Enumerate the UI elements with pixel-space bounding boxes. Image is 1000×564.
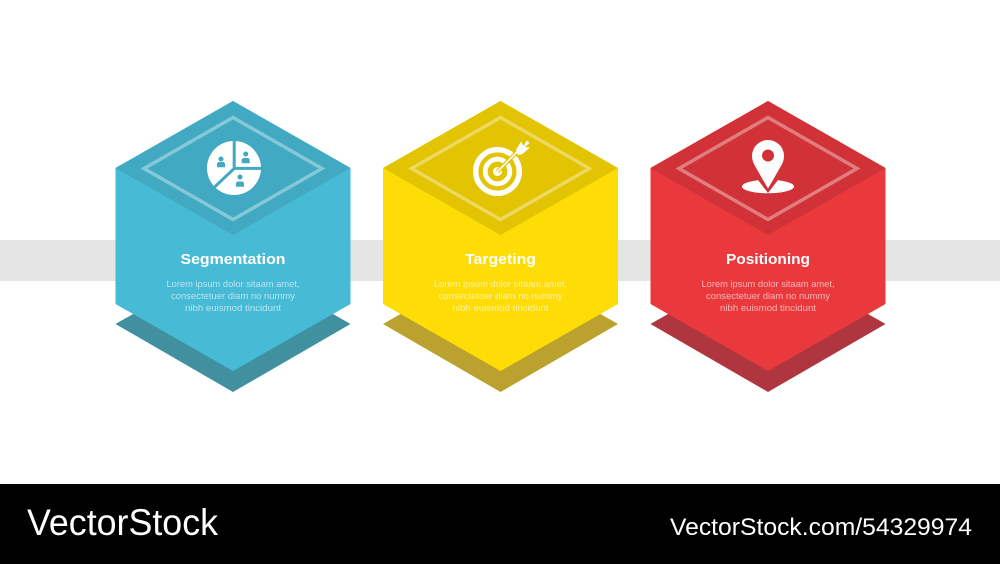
text block: positioning: Lorem ipsum dolor sitaam amet, xyxy=(702,278,834,289)
icon: target with arrow xyxy=(476,140,530,193)
top diamond: positioning xyxy=(650,101,886,235)
shadow: targeting xyxy=(383,257,618,392)
text block: positioning: nibh euismod tincidunt xyxy=(720,302,816,313)
heading: targeting: Targeting xyxy=(465,251,536,268)
text block: segmentation: Lorem ipsum dolor sitaam amet, xyxy=(166,278,300,289)
panel: segmentation xyxy=(116,101,350,392)
text block: targeting: Lorem ipsum dolor sitaam amet, xyxy=(434,278,567,289)
inner diamond outline: targeting xyxy=(412,118,590,220)
text block: positioning: consectetuer diam no nummy xyxy=(706,290,830,301)
text block: targeting xyxy=(434,278,567,313)
text block: segmentation: nibh euismod tincidunt xyxy=(185,302,281,313)
top diamond: segmentation xyxy=(116,101,350,235)
text block: targeting: nibh euismod tincidunt xyxy=(452,302,549,313)
text block: targeting: consectetuer diam no nummy xyxy=(438,290,563,301)
hexagon body: positioning xyxy=(650,101,886,371)
panel: targeting xyxy=(383,101,618,392)
text block: segmentation xyxy=(166,278,300,313)
background band xyxy=(0,240,1000,281)
icon: map pin xyxy=(742,140,794,193)
heading: positioning: Positioning xyxy=(726,251,810,268)
panel: positioning xyxy=(650,101,886,392)
footer logo text: VectorStock xyxy=(27,502,218,543)
footer url: VectorStock.com/54329974 xyxy=(670,514,972,541)
icon: pie chart with people xyxy=(207,139,263,195)
text block: segmentation: consectetuer diam no nummy xyxy=(171,290,295,301)
text block: positioning xyxy=(702,278,834,313)
inner diamond outline: segmentation xyxy=(144,118,322,220)
heading: segmentation: Segmentation xyxy=(180,251,286,268)
shadow: segmentation xyxy=(116,257,350,392)
hexagon body: segmentation xyxy=(116,101,350,371)
footer bar xyxy=(0,484,1000,564)
inner diamond outline: positioning xyxy=(679,118,857,220)
hexagon body: targeting xyxy=(383,101,618,371)
shadow: positioning xyxy=(650,257,886,392)
top diamond: targeting xyxy=(383,101,618,235)
